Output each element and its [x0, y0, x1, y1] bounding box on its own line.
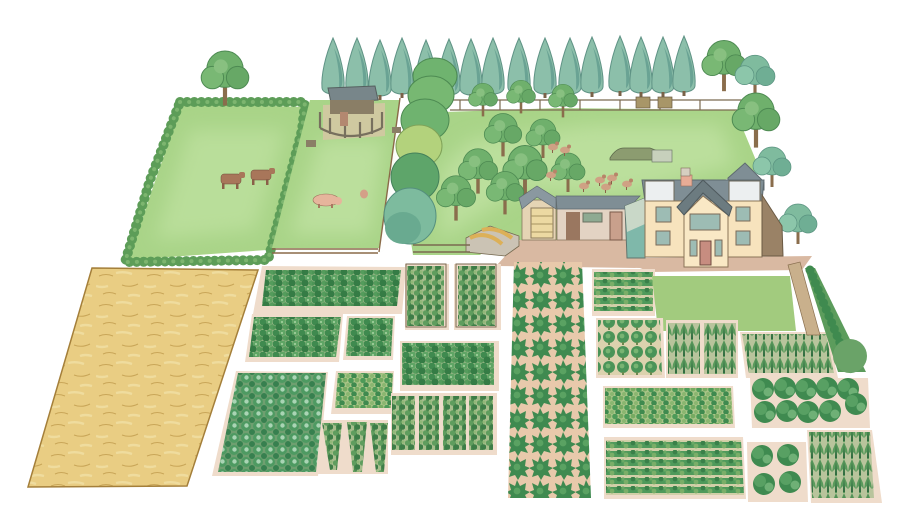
barn: [519, 186, 556, 240]
greenhouse: [625, 198, 645, 258]
field fence: [413, 245, 470, 252]
squash bed: [747, 442, 808, 502]
cabbage bed: [212, 371, 328, 476]
polytunnel coop: [610, 148, 672, 162]
light meadow patch: [440, 125, 735, 240]
long central bed: [508, 262, 591, 498]
lawn: [652, 276, 796, 331]
vegetable bed: [331, 371, 394, 414]
large shrub bed: [750, 377, 870, 428]
windows: [656, 207, 750, 256]
orchard trees: [436, 80, 585, 221]
paddock: pigs: [272, 98, 400, 253]
right-hand trees: [702, 40, 817, 244]
door: [700, 241, 711, 265]
skylights: [645, 181, 760, 201]
row of cypress trees: [322, 36, 695, 100]
rear gable: [728, 163, 764, 190]
walls: [645, 201, 762, 257]
climbing beans: [391, 393, 497, 455]
large tree column: [384, 58, 457, 244]
pig: [313, 194, 342, 208]
paddock: cows: [125, 102, 305, 262]
vegetable bed: [343, 316, 395, 360]
wooden frames and hedge at right: [788, 262, 867, 373]
cows: [221, 168, 275, 189]
animal pen: [306, 86, 401, 147]
rear fence: [450, 100, 745, 110]
corn bed: [666, 320, 738, 378]
brick yard: [496, 240, 812, 272]
orchard meadow: [403, 108, 760, 255]
bee hives: [636, 97, 672, 108]
vegetable bed: [400, 341, 499, 391]
side shed: [762, 195, 783, 256]
tall crop bed: [807, 430, 882, 503]
long outbuilding: [556, 196, 640, 240]
compost bins: [466, 226, 519, 256]
tree: paddock: [201, 51, 249, 106]
wheat field: [28, 268, 258, 487]
low rows bed: [603, 386, 735, 428]
front gable: [684, 196, 728, 267]
rows bed: [604, 437, 746, 499]
trellis bed: [405, 264, 449, 330]
vegetable bed: [592, 269, 655, 316]
farmhouse: [642, 163, 764, 267]
trellis bed: [454, 264, 501, 330]
main roof: [642, 180, 764, 201]
piglet: [360, 190, 368, 198]
vegetable bed: [253, 266, 406, 314]
vegetable bed: [740, 332, 838, 378]
brussels sprouts bed: [318, 420, 388, 474]
vegetable bed: [245, 314, 343, 362]
vegetable bed: [596, 318, 665, 378]
chickens: [546, 142, 633, 193]
chimney: [681, 168, 692, 186]
